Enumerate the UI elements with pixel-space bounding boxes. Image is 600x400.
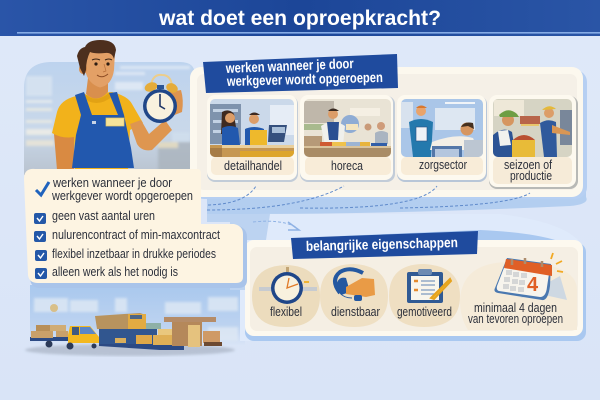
banner line 1: werken wanneer je door	[225, 55, 354, 76]
panel: shop background behind worker	[24, 62, 195, 175]
figure: worker holding alarm clock	[52, 40, 183, 170]
illustration: truck and boxes	[25, 313, 235, 356]
item 4: alleen werk als het nodig is	[52, 264, 178, 279]
label line 1: minimaal 4 dagen	[474, 300, 557, 315]
banner: belangrijke eigenschappen	[291, 231, 478, 259]
item: flexibel	[252, 265, 320, 327]
hair	[77, 40, 116, 76]
truck cab	[68, 326, 99, 343]
illustration: nurse and patient	[401, 99, 483, 157]
illustration: retail counter	[210, 99, 294, 157]
name tag	[106, 118, 124, 126]
label: horeca	[331, 158, 364, 173]
fingers	[170, 90, 183, 116]
flatbed with boxes	[30, 337, 70, 341]
icon: calendar: 4	[527, 274, 539, 296]
header band	[0, 0, 600, 36]
blue machine	[99, 329, 157, 345]
label: flexibel	[270, 304, 302, 319]
card: horeca	[300, 95, 395, 182]
arrows: dashed connectors	[207, 186, 530, 210]
head	[85, 46, 115, 88]
card: seizoen of productie	[489, 95, 578, 189]
right forearm	[130, 120, 172, 150]
neck	[86, 78, 108, 99]
card: detailhandel	[207, 95, 298, 182]
left arm	[54, 134, 74, 170]
item: minimaal 4 dagen	[460, 253, 577, 330]
label: dienstbaar	[331, 304, 381, 319]
golden boxes	[153, 335, 181, 345]
label line 2: van tevoren oproepen	[468, 311, 563, 326]
item: gemotiveerd	[389, 264, 460, 327]
panel: top right sectors	[190, 67, 587, 214]
title: wat doet een oproepkracht?	[158, 7, 441, 30]
item 1: geen vast aantal uren	[52, 208, 155, 223]
item 3: flexibel inzetbaar in drukke periodes	[52, 246, 216, 261]
banner line 2: werkgever wordt opgeroepen	[226, 69, 383, 89]
label: seizoen of	[504, 157, 552, 172]
yellow shirt	[52, 92, 143, 170]
panel: key properties	[207, 214, 586, 341]
label area	[211, 157, 294, 175]
icon: stopwatch	[259, 267, 317, 304]
illustration: cafe counter	[304, 99, 391, 157]
icon: headset and hand	[335, 269, 375, 301]
label area	[493, 157, 572, 184]
pallet	[99, 344, 184, 350]
ground shadow	[25, 344, 235, 356]
label area	[401, 157, 483, 175]
label area	[305, 157, 391, 175]
card: checklist	[24, 169, 247, 288]
label: detailhandel	[224, 158, 282, 173]
banner text: belangrijke eigenschappen	[306, 234, 458, 254]
item: dienstbaar	[320, 264, 388, 327]
heading line 1: werken wanneer je door	[52, 175, 173, 190]
blue overalls	[72, 92, 134, 168]
icon: clipboard and pencil	[407, 269, 451, 303]
backdrop: warehouse scene	[30, 285, 245, 345]
heading line 2: werkgever wordt opgeroepen	[51, 188, 193, 203]
label: zorgsector	[419, 157, 468, 172]
label: gemotiveerd	[397, 304, 452, 319]
checkbox 3	[35, 250, 47, 261]
label second line: productie	[510, 168, 552, 183]
face details	[94, 62, 98, 66]
illustration: seasonal workers	[493, 99, 572, 157]
big check	[36, 182, 49, 195]
checkbox 1	[34, 213, 46, 224]
arrow: to properties panel	[253, 221, 299, 230]
checkbox 4	[35, 268, 47, 279]
alarm clock	[143, 75, 179, 123]
banner: werken wanneer	[203, 54, 398, 93]
item 2: nulurencontract of min-maxcontract	[52, 227, 220, 242]
tall crate	[95, 313, 146, 329]
brown stack	[164, 317, 216, 322]
collar	[81, 92, 113, 103]
card: zorgsector	[397, 95, 487, 182]
checkbox 2	[34, 231, 46, 242]
